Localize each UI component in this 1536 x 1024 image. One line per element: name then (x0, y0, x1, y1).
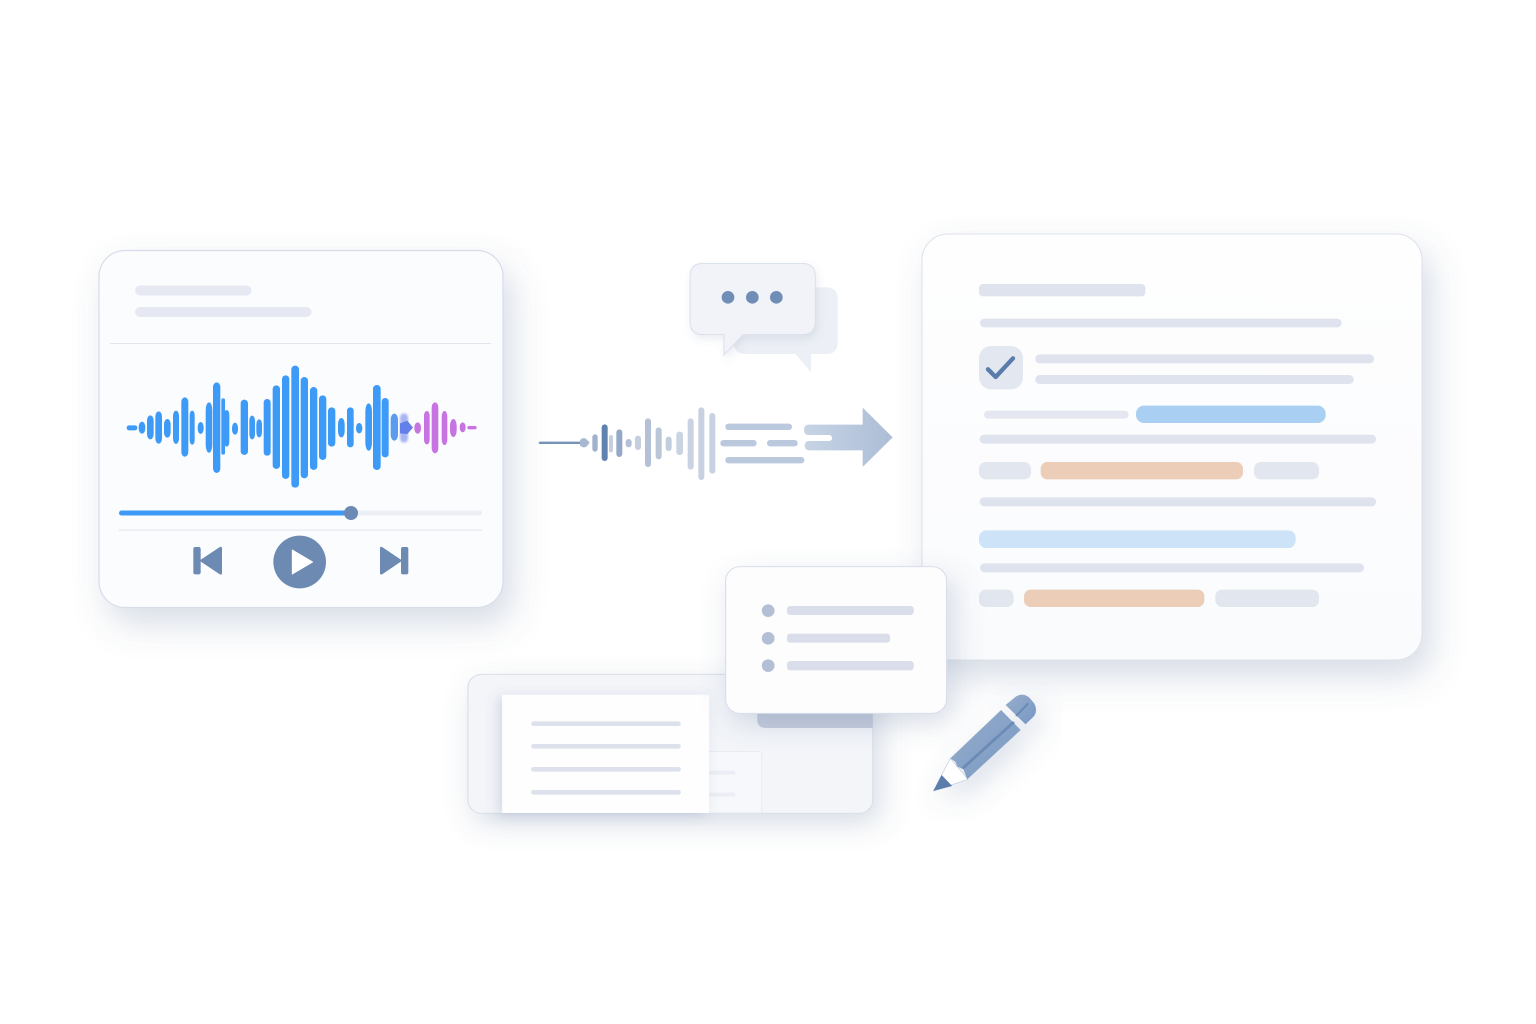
progress slider (119, 506, 482, 520)
panel: transcript document (922, 234, 1422, 660)
text lines (720, 424, 804, 463)
front paper (502, 695, 709, 813)
audio waveform (127, 366, 477, 488)
tag row 2 (979, 590, 1319, 607)
tag row 1 (979, 462, 1319, 479)
front speech bubble (690, 263, 815, 355)
tray tab (757, 710, 873, 728)
stacked papers tray and list card (468, 567, 1036, 813)
document text lines (979, 284, 1376, 572)
mini waveform (539, 407, 715, 480)
back paper (701, 752, 762, 813)
player controls (193, 536, 408, 588)
speech bubbles (690, 263, 838, 372)
panel: list card (726, 567, 947, 713)
icon: checkbox (979, 346, 1023, 389)
icon: pencil (933, 695, 1036, 791)
conversion graphic: waveform to text arrow (539, 407, 893, 480)
audio title placeholders (135, 286, 312, 317)
panel: tray (468, 674, 873, 813)
panel: audio player (99, 250, 503, 608)
back speech bubble (734, 287, 838, 372)
blue highlight (1136, 406, 1326, 423)
light blue highlight (979, 530, 1296, 548)
arrow (804, 408, 893, 467)
